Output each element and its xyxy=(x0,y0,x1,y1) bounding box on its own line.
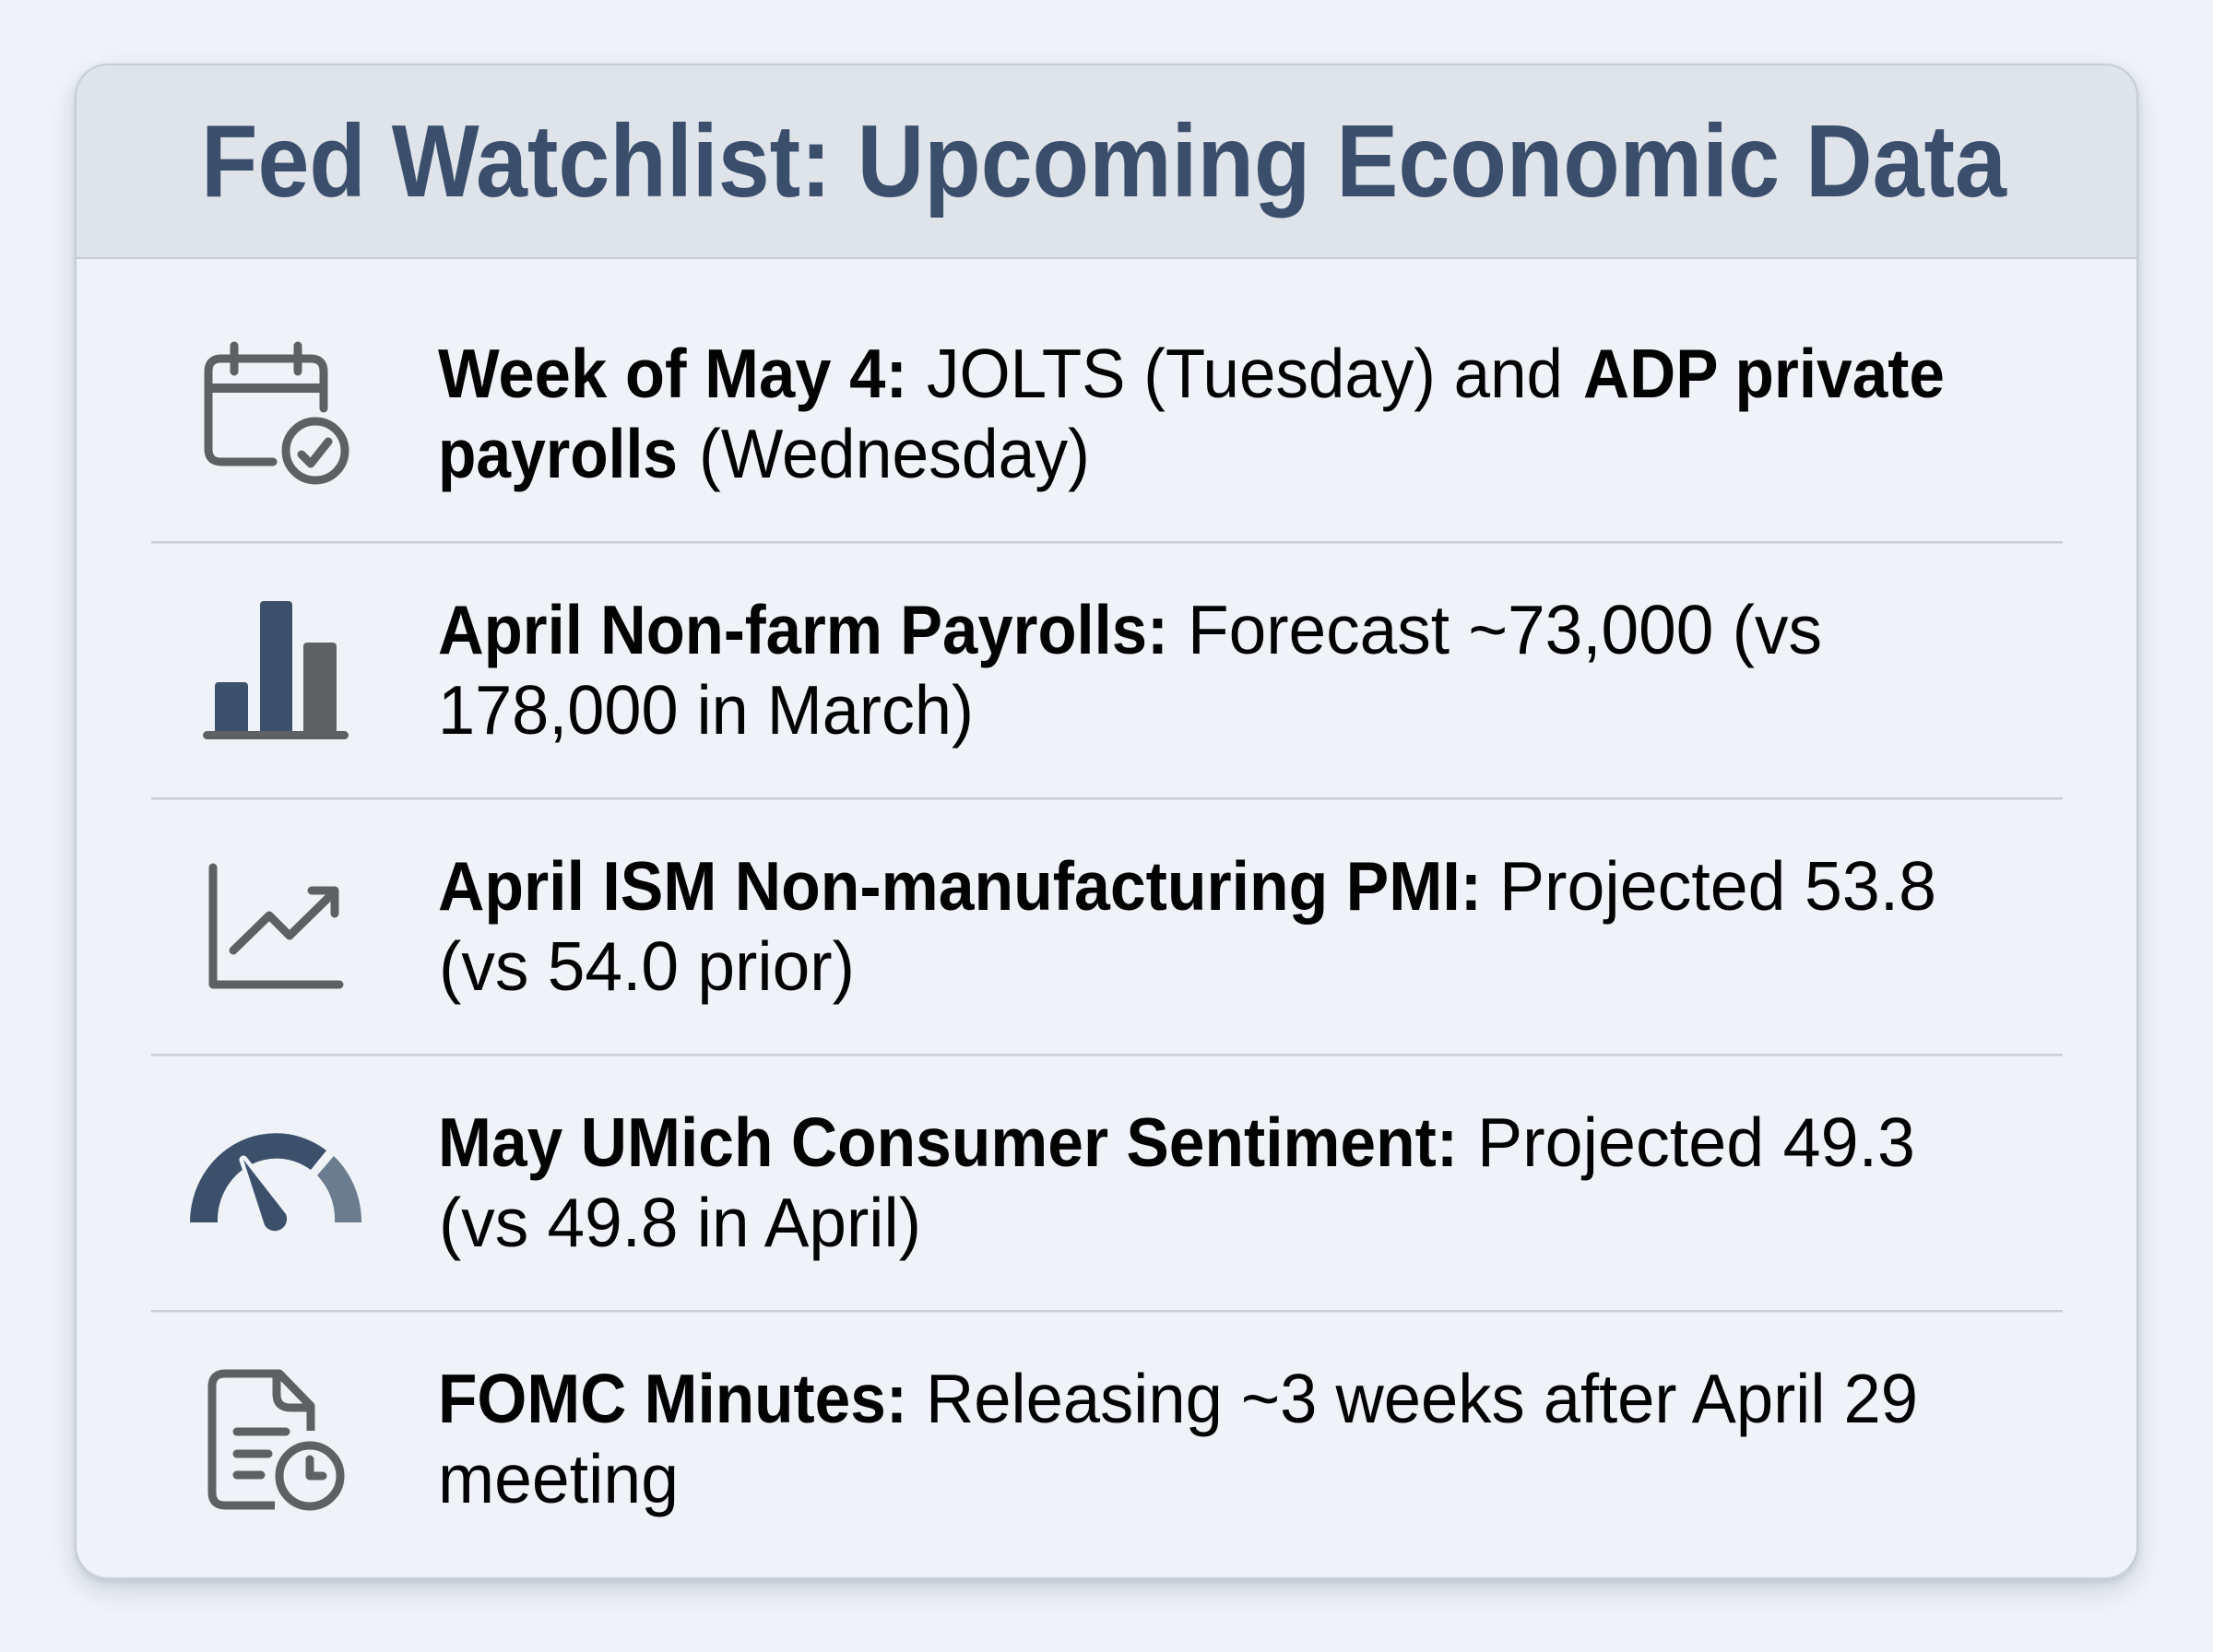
row 5 text: Releasing ~3 weeks after April 29 xyxy=(926,1360,1918,1437)
title: Fed Watchlist: Upcoming Economic Data xyxy=(201,104,2007,218)
divider xyxy=(151,1310,2063,1313)
divider xyxy=(151,1054,2063,1056)
row 2 text: 178,000 in March) xyxy=(438,671,974,749)
row 4 text: (vs 49.8 in April) xyxy=(439,1184,921,1261)
row 1 text: (Wednesday) xyxy=(699,415,1090,492)
row 2 text xyxy=(438,591,1822,749)
row 4 text: Projected 49.3 xyxy=(1477,1103,1915,1181)
divider xyxy=(151,797,2063,800)
row 5 icon: document with clock xyxy=(212,1374,340,1506)
row 4 icon: gauge xyxy=(190,1133,361,1231)
row 1 text: ADP private xyxy=(1583,335,1945,412)
row 4 text xyxy=(438,1103,1915,1261)
divider xyxy=(151,541,2063,544)
row 1 text: payrolls xyxy=(438,415,678,492)
row 5 text: FOMC Minutes: xyxy=(438,1360,907,1437)
row 1 text xyxy=(438,335,1945,492)
row 3 text: Projected 53.8 xyxy=(1499,847,1936,925)
row 5 text xyxy=(438,1360,1918,1517)
panel: header band xyxy=(77,65,2136,259)
row 2 text: Forecast ~73,000 (vs xyxy=(1188,591,1822,668)
row 2 text: April Non-farm Payrolls: xyxy=(438,591,1168,668)
row 1 icon: calendar with check xyxy=(208,346,345,480)
row 3 text: April ISM Non-manufacturing PMI: xyxy=(438,847,1482,925)
row 3 text: (vs 54.0 prior) xyxy=(439,927,855,1005)
row 1 text: Week of May 4: xyxy=(438,335,907,412)
row 1 text: JOLTS (Tuesday) and xyxy=(927,335,1563,412)
row 4 text: May UMich Consumer Sentiment: xyxy=(438,1103,1458,1181)
row 5 text: meeting xyxy=(438,1440,679,1517)
row 2 icon: bar chart xyxy=(203,601,349,739)
row 3 icon: line chart with arrow xyxy=(213,867,339,985)
row 3 text xyxy=(438,847,1936,1005)
